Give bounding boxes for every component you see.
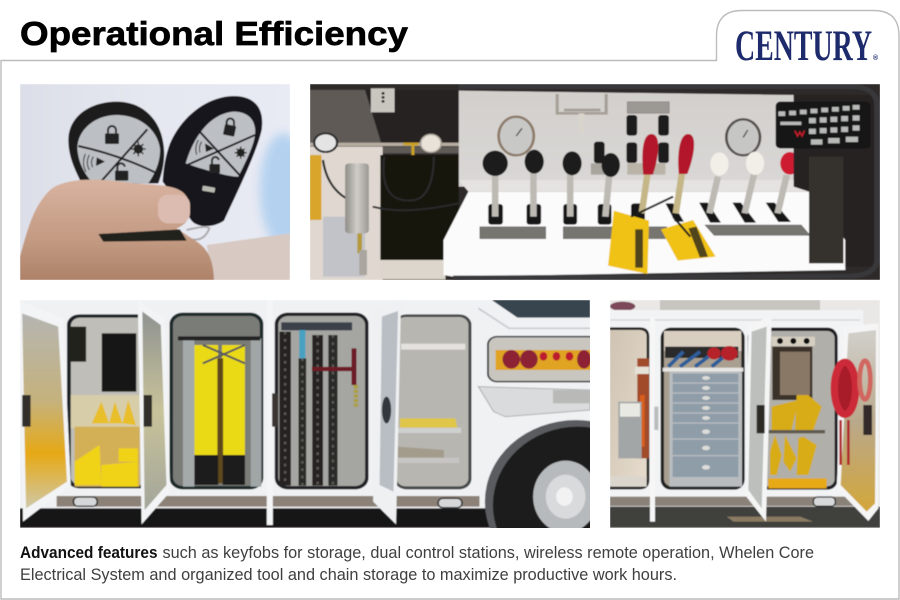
step strip [610, 497, 853, 506]
lever shafts [495, 172, 787, 217]
white control panel [444, 91, 845, 277]
compartment 1 [66, 314, 142, 489]
lever knobs: red [642, 134, 799, 175]
yellow chock compartment [748, 328, 838, 490]
caption text: Electrical System and organized tool and chain storage to maximize productive work hours. [20, 566, 677, 584]
step light [813, 497, 835, 506]
rocker switches [591, 115, 669, 175]
caption text [20, 544, 814, 584]
rear light box [488, 337, 599, 382]
keyring [187, 227, 209, 240]
photo: keyfobs held in a hand [20, 84, 307, 280]
ground [20, 507, 490, 528]
step panel [478, 387, 590, 417]
photo: truck side compartments with chains and tools [20, 300, 590, 528]
keypad [776, 95, 874, 267]
icon: left keyfob [68, 102, 164, 183]
ground [610, 507, 880, 528]
compartment 4 shelves [394, 314, 471, 489]
truck body [610, 310, 863, 497]
gauges [499, 117, 760, 155]
icon: right keyfob [163, 96, 262, 226]
drawer compartment [661, 328, 745, 490]
yellow tags [608, 197, 716, 274]
caption text: such as keyfobs for storage, dual control stations, wireless remote operation, Whelen Core [162, 544, 814, 562]
logo: Century: ® [873, 54, 879, 62]
step lights [73, 497, 462, 508]
title: Operational Efficiency [20, 16, 408, 53]
hoses and filter area [310, 88, 459, 280]
hand [20, 180, 214, 280]
compartment 3 with chains [275, 313, 369, 489]
open doors [650, 317, 878, 522]
lever knobs: black [483, 150, 620, 177]
rear wheel [485, 420, 667, 583]
step strip [57, 496, 480, 507]
photo: dual control station [310, 84, 880, 280]
red hose [834, 361, 870, 465]
compartment frame [453, 87, 877, 278]
label plates [480, 225, 810, 239]
open doors [20, 300, 401, 525]
lever slots [488, 203, 791, 225]
caption text: Advanced features [20, 544, 158, 562]
photo: truck compartments with drawers and hose reel [610, 300, 880, 528]
lever knobs: white [710, 152, 764, 176]
left compartment [610, 327, 649, 489]
compartment 2 [170, 313, 263, 489]
